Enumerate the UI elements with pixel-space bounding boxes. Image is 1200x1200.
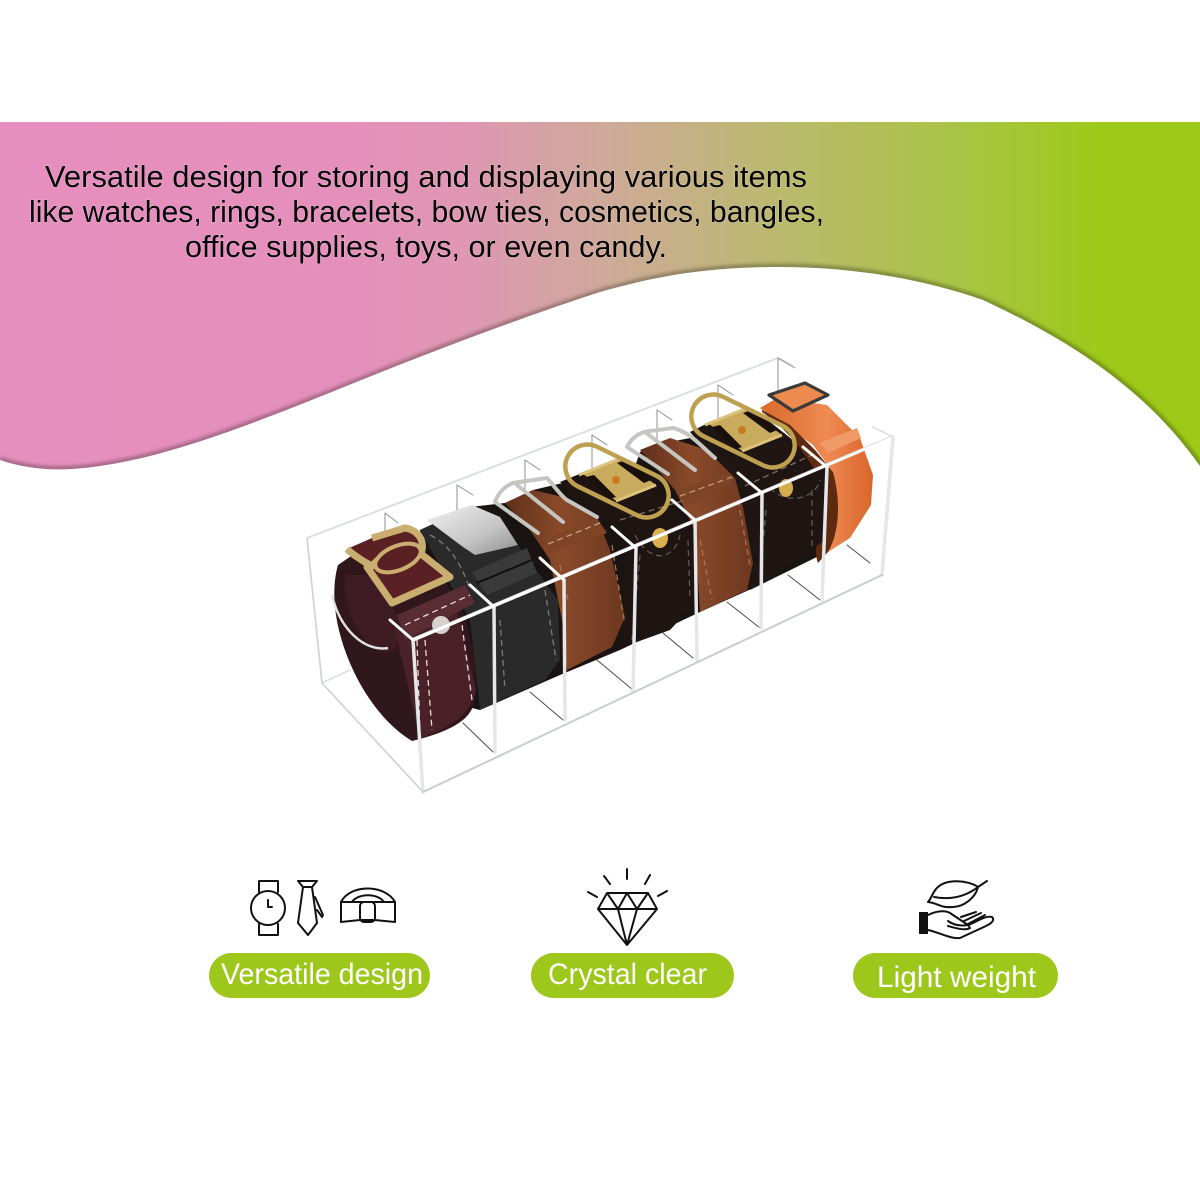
acrylic front walls and dividers [307, 436, 893, 792]
belt: orange [760, 383, 873, 563]
icon: watch [251, 881, 285, 935]
belt: black with silver buckle [420, 505, 560, 710]
feature: crystal clear [531, 869, 734, 998]
acrylic back and floor [307, 358, 893, 792]
belt: dark with gold buckle (front) [558, 437, 698, 647]
pill: versatile design [209, 953, 430, 998]
icon: belt loop [341, 888, 395, 922]
feature: versatile design [209, 881, 430, 998]
belt: brown (first) [495, 478, 625, 670]
belt: brown (second) [627, 428, 753, 612]
headline text: office supplies, toys, or even candy. [185, 229, 667, 264]
headline text: like watches, rings, bracelets, bow ties, cosmetics, bangles, [29, 194, 824, 229]
belt: dark with gold buckle (rear) [684, 387, 827, 590]
wave banner [0, 122, 1200, 469]
pill: versatile design: Versatile design [221, 958, 423, 991]
pill: light weight: Light weight [877, 961, 1037, 994]
icon: diamond [588, 869, 667, 945]
icon: leaf over hand [919, 881, 993, 938]
pill: crystal clear: Crystal clear [548, 958, 707, 991]
pill: crystal clear [531, 953, 734, 998]
headline text: Versatile design for storing and displaying various items [45, 159, 807, 194]
icon: necktie [298, 881, 323, 935]
headline text [29, 159, 824, 264]
product: acrylic belt organizer [307, 358, 893, 792]
pill: light weight [853, 953, 1058, 998]
belt mass shadow [420, 414, 827, 710]
feature: light weight [853, 881, 1058, 998]
belt: burgundy with gold DC buckle [332, 528, 476, 741]
